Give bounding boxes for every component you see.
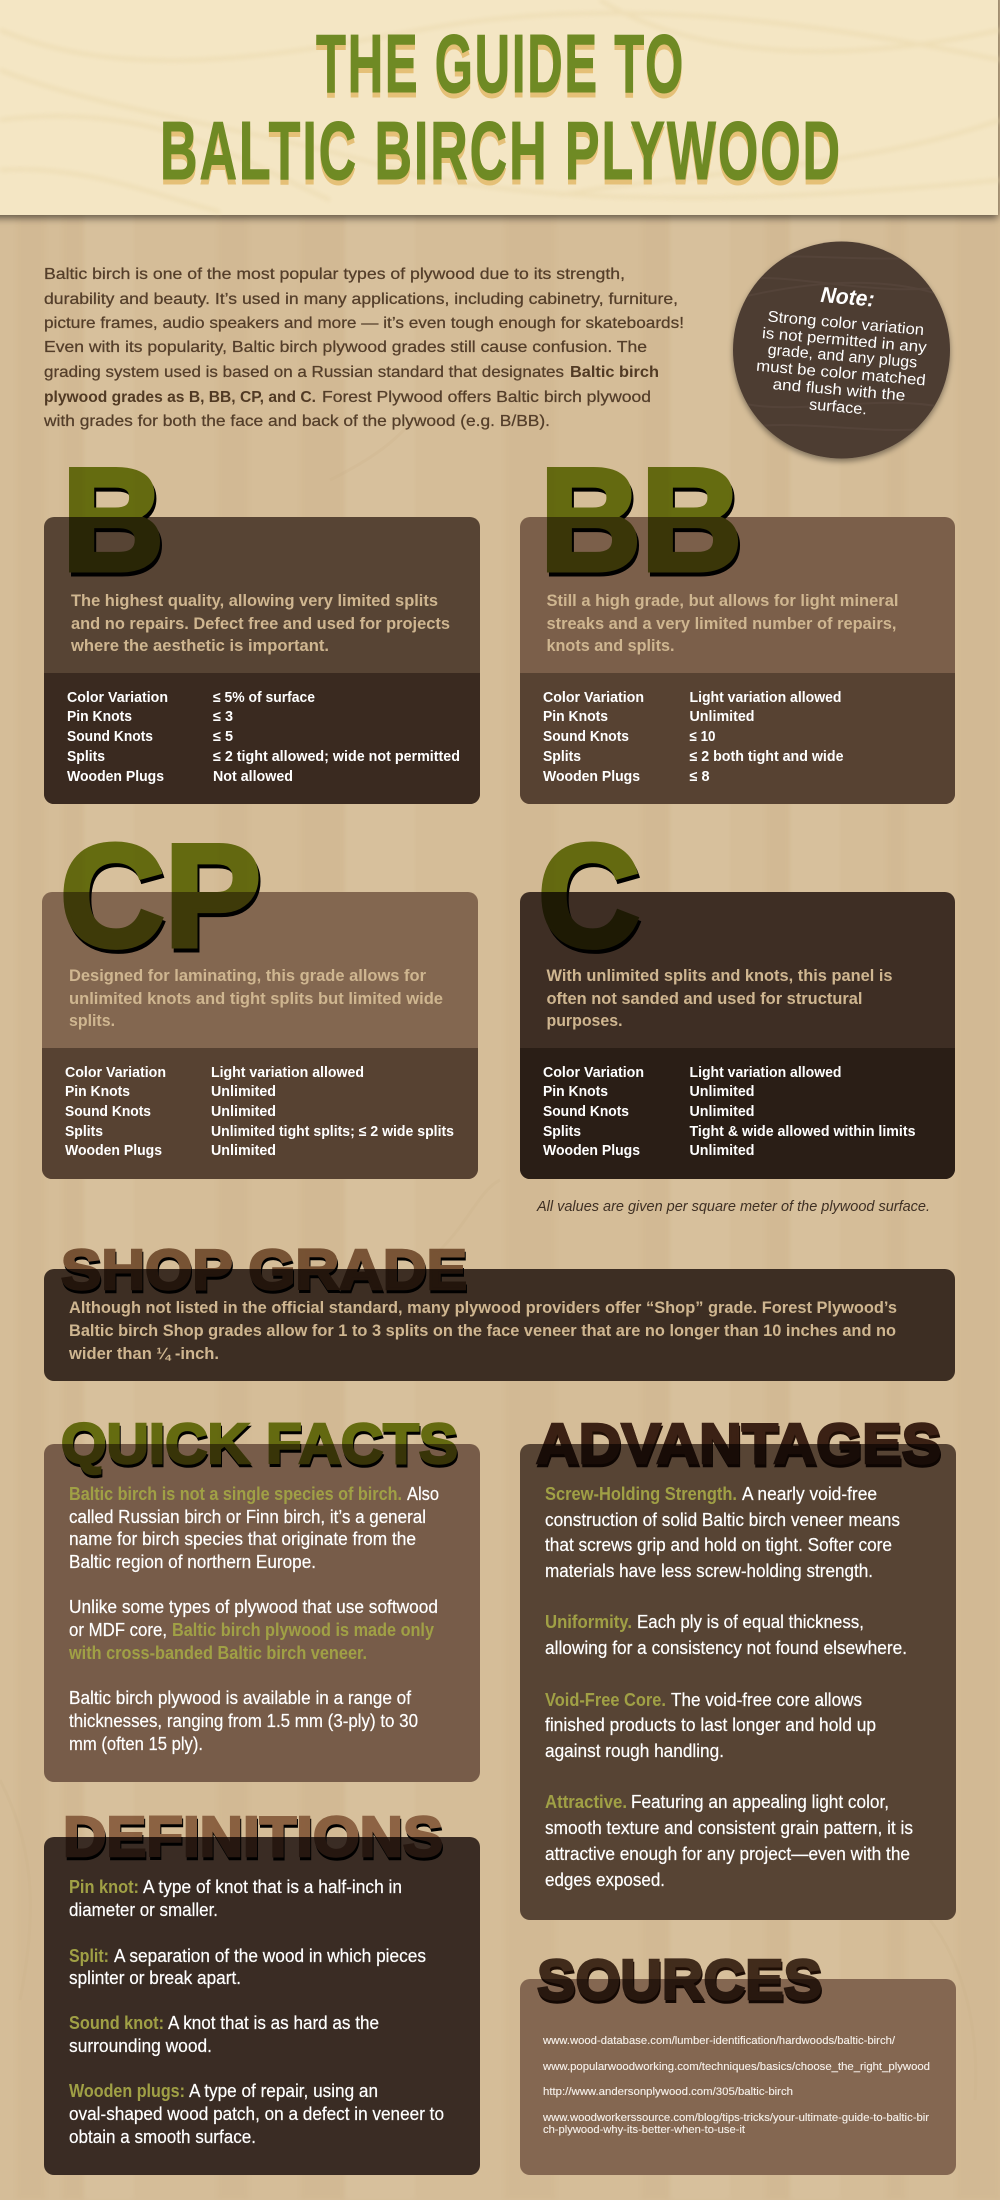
advantages text: that screws grip and hold on tight. Softer core (545, 1535, 892, 1555)
grade letters CP: CP (62, 818, 263, 981)
description B: where the aesthetic is important. (70, 637, 329, 655)
heading: shop grade: SHOP GRADE (61, 1238, 467, 1302)
spec table BB: ≤ 8 (690, 769, 710, 785)
spec table C (543, 1065, 916, 1159)
spec table BB: Color Variation (543, 690, 644, 706)
heading: definitions: DEFINITIONS (64, 1808, 444, 1872)
note text: grade, and any plugs (767, 342, 918, 372)
spec table C: Sound Knots (543, 1104, 629, 1120)
note text: and flush with the (772, 376, 906, 405)
quick facts text: Baltic birch is not a single species of birch. (69, 1484, 402, 1504)
sources links: www.woodworkerssource.com/blog/tips-tricks/your-ultimate-guide-to-baltic-bir (542, 2112, 929, 2124)
footnote: All values are given per square meter of the plywood surface. (536, 1199, 930, 1215)
definitions text: Wooden plugs: (69, 2081, 185, 2101)
quick facts text: Baltic birch plywood is made only (172, 1620, 434, 1640)
advantages text: allowing for a consistency not found elsewhere. (545, 1638, 907, 1658)
definitions text: A type of knot that is a half-inch in (143, 1877, 402, 1897)
spec table B: Wooden Plugs (67, 769, 164, 785)
spec table B: ≤ 5 (213, 729, 233, 745)
grade letter C: C (538, 814, 640, 977)
definitions text: Split: (69, 1946, 109, 1966)
quick facts text: thicknesses, ranging from 1.5 mm (3-ply) to 30 (69, 1711, 418, 1731)
intro paragraph: grading system used is based on a Russian standard that designates (44, 364, 564, 381)
note text (753, 277, 933, 423)
note text: Strong color variation (767, 308, 925, 339)
sources links (542, 2035, 930, 2136)
intro paragraph: with grades for both the face and back of the plywood (e.g. B/BB). (43, 413, 550, 430)
quick facts text: Baltic region of northern Europe. (69, 1552, 316, 1572)
description BB: Still a high grade, but allows for light mineral (546, 592, 898, 610)
spec table C: Unlimited (690, 1084, 754, 1100)
panel B background (44, 517, 480, 804)
sources links: ch-plywood-why-its-better-when-to-use-it (543, 2124, 745, 2136)
description B: The highest quality, allowing very limited splits (71, 592, 438, 610)
advantages text: Each ply is of equal thickness, (637, 1612, 864, 1632)
quick facts text (68, 1484, 439, 1754)
spec table BB: Pin Knots (543, 709, 608, 725)
description CP: Designed for laminating, this grade allows for (69, 967, 427, 985)
panel: advantages (520, 1412, 956, 1920)
description CP (69, 967, 443, 1030)
heading: advantages: ADVANTAGES (537, 1415, 942, 1479)
spec table C: Unlimited (690, 1104, 754, 1120)
quick facts text: with cross-banded Baltic birch veneer. (68, 1643, 367, 1663)
grade letters CP: CP (60, 814, 261, 977)
grade letter C: C (540, 818, 642, 981)
panel: definitions (44, 1805, 480, 2175)
spec table BB: Sound Knots (543, 729, 629, 745)
advantages text: Attractive. (545, 1792, 627, 1812)
spec table CP: Color Variation (65, 1065, 166, 1081)
advantages text: attractive enough for any project—even with the (545, 1844, 910, 1864)
definitions text: Sound knot: (69, 2013, 164, 2033)
intro paragraph: picture frames, audio speakers and more — it’s even tough enough for skateboards! (44, 315, 684, 332)
panel C background (520, 892, 955, 1179)
panel: grade B (44, 438, 480, 804)
spec table CP: Light variation allowed (211, 1065, 364, 1081)
definitions text: A type of repair, using an (189, 2081, 378, 2101)
advantages text: Void-Free Core. (545, 1690, 666, 1710)
note text: surface. (808, 396, 868, 418)
spec table B (67, 690, 460, 785)
intro paragraph (43, 266, 684, 430)
sources links: www.wood-database.com/lumber-identification/hardwoods/baltic-birch/ (542, 2035, 896, 2047)
definitions text: oval-shaped wood patch, on a defect in veneer to (69, 2104, 444, 2124)
description CP: unlimited knots and tight splits but limited wide (69, 990, 443, 1008)
note text: must be color matched (756, 358, 926, 389)
heading: definitions: DEFINITIONS (63, 1805, 443, 1869)
title line 1 (316, 17, 685, 115)
spec table CP: Sound Knots (65, 1104, 151, 1120)
sources links: http://www.andersonplywood.com/305/baltic-birch (543, 2086, 793, 2098)
panel: quick facts (44, 1412, 480, 1782)
spec table B: Pin Knots (67, 709, 132, 725)
spec table CP: Unlimited (211, 1084, 276, 1100)
definitions text: A separation of the wood in which pieces (114, 1946, 426, 1966)
quick facts text: Also (407, 1484, 439, 1504)
heading: shop grade: SHOP GRADE (62, 1241, 468, 1305)
quick facts text: name for birch species that originate from the (69, 1529, 416, 1549)
spec table B: Color Variation (67, 690, 168, 706)
spec table CP: Unlimited (211, 1143, 276, 1159)
advantages text: construction of solid Baltic birch veneer means (545, 1510, 900, 1530)
panel: grade CP (42, 814, 478, 1179)
note text: is not permitted in any (761, 325, 928, 356)
sources background (520, 1979, 956, 2175)
description C: purposes. (546, 1012, 622, 1030)
spec table BB: Wooden Plugs (543, 769, 640, 785)
definitions text: diameter or smaller. (69, 1900, 218, 1920)
quick facts text: Baltic birch plywood is available in a range of (69, 1688, 412, 1708)
quick facts text: or MDF core, (69, 1620, 167, 1640)
sources links: www.popularwoodworking.com/techniques/basics/choose_the_right_plywood (542, 2061, 930, 2073)
intro paragraph: Even with its popularity, Baltic birch plywood grades still cause confusion. The (44, 339, 647, 356)
definitions text: obtain a smooth surface. (69, 2127, 256, 2147)
description C: With unlimited splits and knots, this panel is (546, 967, 892, 985)
definitions text: Pin knot: (69, 1877, 139, 1897)
heading: advantages: ADVANTAGES (536, 1412, 941, 1476)
spec table CP: Unlimited tight splits; ≤ 2 wide splits (211, 1124, 454, 1140)
heading: quick facts: QUICK FACTS (61, 1412, 458, 1476)
intro paragraph: durability and beauty. It’s used in many applications, including cabinetry, furniture, (44, 291, 678, 308)
advantages text: Featuring an appealing light color, (631, 1792, 889, 1812)
definitions background (44, 1837, 480, 2175)
shop grade text: Although not listed in the official standard, many plywood providers offer “Shop” grade. Forest Plywood’s (69, 1299, 897, 1317)
intro paragraph: plywood grades as B, BB, CP, and C. (44, 389, 316, 406)
panel CP background (42, 892, 478, 1179)
spec table B: ≤ 5% of surface (213, 690, 315, 706)
description BB (546, 592, 898, 655)
note text: Note: (820, 282, 876, 312)
spec table CP (65, 1065, 454, 1159)
advantages text: edges exposed. (545, 1870, 665, 1890)
title line 1: THE GUIDE TO (316, 17, 685, 110)
shop grade text: wider than ¼ -inch. (68, 1345, 219, 1363)
heading: sources: SOURCES (538, 1951, 823, 2015)
description BB: knots and splits. (546, 637, 674, 655)
panel: grade C (520, 814, 955, 1179)
heading: sources: SOURCES (537, 1948, 822, 2012)
spec table B: Not allowed (213, 769, 293, 785)
intro paragraph: Forest Plywood offers Baltic birch plywood (322, 389, 651, 406)
panel: grade BB (520, 438, 955, 804)
spec table BB (543, 690, 844, 785)
description CP: splits. (69, 1012, 115, 1030)
title line 1: THE GUIDE TO (316, 22, 685, 115)
spec table B: ≤ 2 tight allowed; wide not permitted (213, 749, 460, 765)
spec table B: Splits (67, 749, 105, 765)
grade letters BB: BB (540, 438, 742, 601)
spec table BB: ≤ 10 (690, 729, 716, 745)
spec table C: Unlimited (690, 1143, 754, 1159)
spec table CP: Pin Knots (65, 1084, 130, 1100)
note badge: circle (730, 242, 955, 458)
advantages text: smooth texture and consistent grain pattern, it is (545, 1818, 913, 1838)
spec table BB: Unlimited (690, 709, 754, 725)
spec table BB: Splits (543, 749, 581, 765)
panel BB background (520, 517, 955, 804)
advantages text: A nearly void-free (742, 1484, 877, 1504)
spec table B: ≤ 3 (213, 709, 233, 725)
shop grade text: Baltic birch Shop grades allow for 1 to 3 splits on the face veneer that are no longer than 10 inches and no (69, 1322, 896, 1340)
grade letter B: B (62, 438, 164, 601)
quick facts text: Unlike some types of plywood that use softwood (69, 1597, 438, 1617)
advantages text: finished products to last longer and hold up (545, 1715, 876, 1735)
definitions text: splinter or break apart. (69, 1968, 241, 1988)
intro paragraph: Baltic birch is one of the most popular types of plywood due to its strength, (44, 266, 625, 283)
description B: and no repairs. Defect free and used for projects (71, 615, 450, 633)
heading: quick facts: QUICK FACTS (62, 1415, 459, 1479)
description BB: streaks and a very limited number of repairs, (546, 615, 896, 633)
grade letter B: B (64, 442, 166, 605)
spec table C: Light variation allowed (690, 1065, 842, 1081)
advantages background (520, 1444, 956, 1920)
shop grade background (44, 1269, 955, 1381)
spec table CP: Splits (65, 1124, 103, 1140)
description C: often not sanded and used for structural (546, 990, 862, 1008)
quick facts text: called Russian birch or Finn birch, it’s a general (69, 1507, 426, 1527)
quick facts text: mm (often 15 ply). (69, 1734, 203, 1754)
spec table C: Splits (543, 1124, 581, 1140)
definitions text: A knot that is as hard as the (168, 2013, 379, 2033)
spec table BB: ≤ 2 both tight and wide (690, 749, 844, 765)
advantages text (545, 1484, 913, 1890)
intro paragraph: Baltic birch (570, 364, 659, 381)
panel: sources (520, 1948, 956, 2175)
spec table CP: Wooden Plugs (65, 1143, 162, 1159)
spec table C: Color Variation (543, 1065, 644, 1081)
quick facts background (44, 1444, 480, 1782)
description B (70, 592, 450, 655)
spec table C: Pin Knots (543, 1084, 608, 1100)
advantages text: against rough handling. (545, 1741, 724, 1761)
shop grade text (68, 1299, 897, 1363)
spec table C: Wooden Plugs (543, 1143, 640, 1159)
description C (546, 967, 892, 1030)
definitions text: surrounding wood. (69, 2036, 212, 2056)
advantages text: materials have less screw-holding strength. (545, 1561, 873, 1581)
spec table BB: Light variation allowed (690, 690, 842, 706)
definitions text (69, 1877, 444, 2147)
header banner: light birch plank (0, 0, 1000, 215)
grade letters BB: BB (542, 442, 744, 605)
spec table C: Tight & wide allowed within limits (690, 1124, 916, 1140)
spec table B: Sound Knots (67, 729, 153, 745)
advantages text: Uniformity. (545, 1612, 632, 1632)
spec table CP: Unlimited (211, 1104, 276, 1120)
title (160, 17, 842, 202)
panel: shop grade (44, 1238, 955, 1381)
advantages text: The void-free core allows (671, 1690, 862, 1710)
advantages text: Screw-Holding Strength. (545, 1484, 737, 1504)
